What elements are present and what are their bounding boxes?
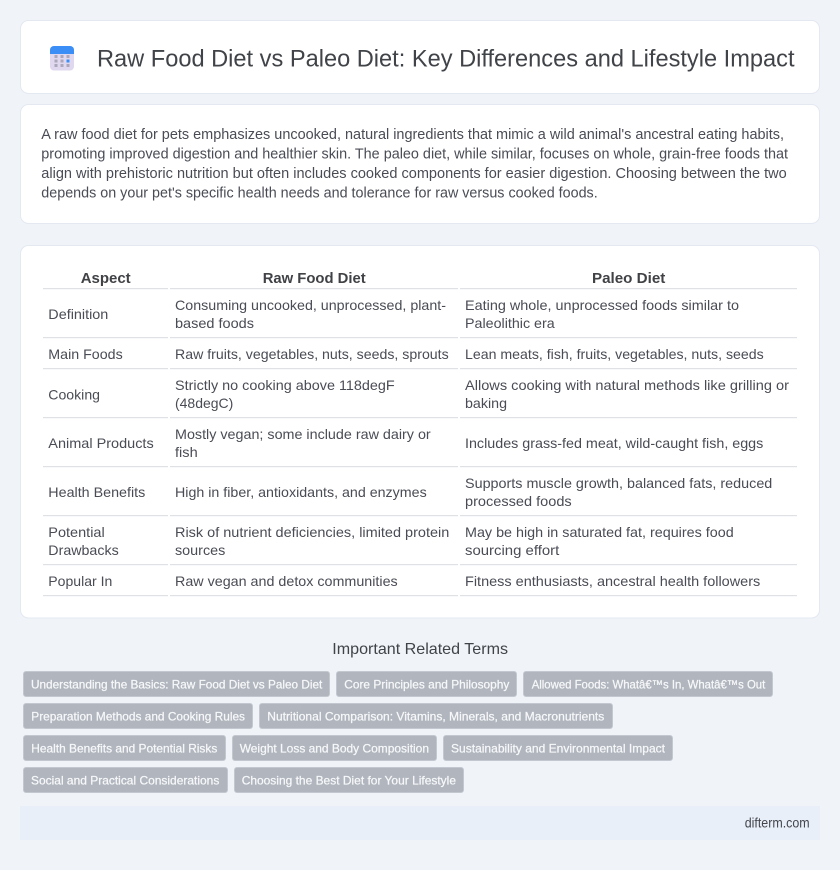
row: animal products: Includes grass-fed meat, wild-caught fish, eggs bbox=[465, 435, 763, 451]
panel: related term tags bbox=[24, 672, 772, 792]
footer: difterm.com bbox=[745, 815, 810, 830]
tag: Social and Practical Considerations bbox=[31, 774, 219, 788]
row: popular in bbox=[48, 573, 760, 589]
tag bbox=[336, 672, 516, 696]
row: main foods bbox=[48, 346, 764, 362]
panel: title card bbox=[20, 20, 820, 94]
row: cooking bbox=[48, 377, 789, 411]
tag: Core Principles and Philosophy bbox=[344, 678, 509, 692]
row: animal products: Animal Products bbox=[48, 435, 154, 451]
row: popular in: Popular In bbox=[48, 573, 112, 589]
text block: introduction paragraph: A raw food diet for pets emphasizes uncooked, natural ingredients that mimic a wild animal's ancestral eating habits, bbox=[41, 127, 784, 143]
row: health benefits bbox=[48, 475, 772, 509]
row: cooking: baking bbox=[465, 395, 507, 411]
tag bbox=[524, 672, 772, 696]
row: definition: Definition bbox=[48, 306, 108, 322]
tag bbox=[260, 704, 612, 728]
row: potential drawbacks: sources bbox=[175, 542, 225, 558]
row: cooking: (48degC) bbox=[175, 395, 233, 411]
table header: Aspect bbox=[81, 270, 131, 287]
row: cooking: Cooking bbox=[48, 386, 100, 402]
row: definition: Eating whole, unprocessed foods similar to bbox=[465, 297, 739, 313]
table header: Paleo Diet bbox=[592, 270, 665, 287]
tag: Allowed Foods: Whatâ€™s In, Whatâ€™s Out bbox=[532, 678, 766, 692]
row: potential drawbacks bbox=[48, 524, 734, 558]
tag: Health Benefits and Potential Risks bbox=[31, 742, 217, 756]
row: animal products: Mostly vegan; some include raw dairy or bbox=[175, 426, 431, 442]
tag: Weight Loss and Body Composition bbox=[240, 742, 429, 756]
row: cooking: Strictly no cooking above 118degF bbox=[175, 377, 395, 393]
row: health benefits: Health Benefits bbox=[48, 484, 145, 500]
tag bbox=[24, 704, 252, 728]
row: potential drawbacks: May be high in saturated fat, requires food bbox=[465, 524, 734, 540]
row: main foods: Lean meats, fish, fruits, vegetables, nuts, seeds bbox=[465, 346, 764, 362]
text block: introduction paragraph: align with prehistoric nutrition but often includes cooked components for easier digestion. Choosing between the two bbox=[41, 166, 787, 182]
text block: introduction paragraph bbox=[41, 127, 788, 201]
row: potential drawbacks: Risk of nutrient deficiencies, limited protein bbox=[175, 524, 449, 540]
tag bbox=[24, 672, 330, 696]
row: health benefits: processed foods bbox=[465, 493, 572, 509]
text block: introduction paragraph: promoting improved digestion and healthier skin. The paleo diet, while similar, focuses on whole, grain-free foods that bbox=[41, 146, 788, 162]
icon: calendar bbox=[50, 46, 74, 70]
row: definition: Consuming uncooked, unprocessed, plant- bbox=[175, 297, 446, 313]
row: definition: Paleolithic era bbox=[465, 315, 555, 331]
footer bbox=[20, 806, 820, 840]
tag: Choosing the Best Diet for Your Lifestyle bbox=[242, 774, 456, 788]
row: popular in: Fitness enthusiasts, ancestral health followers bbox=[465, 573, 760, 589]
heading: important related terms: Important Related Terms bbox=[332, 641, 508, 658]
row: health benefits: High in fiber, antioxidants, and enzymes bbox=[175, 484, 427, 500]
title: Raw Food Diet vs Paleo Diet: Key Differences and Lifestyle Impact bbox=[97, 46, 795, 73]
tag bbox=[24, 768, 228, 792]
tag: Understanding the Basics: Raw Food Diet vs Paleo Diet bbox=[31, 678, 323, 692]
tag bbox=[444, 736, 672, 760]
table header bbox=[81, 270, 665, 287]
tag bbox=[24, 736, 226, 760]
tag bbox=[234, 768, 464, 792]
row: cooking: Allows cooking with natural methods like grilling or bbox=[465, 377, 789, 393]
row: potential drawbacks: sourcing effort bbox=[465, 542, 559, 558]
text block: introduction paragraph: depends on your pet's specific health needs and tolerance for raw versus cooked foods. bbox=[41, 185, 598, 201]
row: potential drawbacks: Potential bbox=[48, 524, 105, 540]
row: definition: based foods bbox=[175, 315, 254, 331]
row: animal products: fish bbox=[175, 444, 198, 460]
row: health benefits: Supports muscle growth, balanced fats, reduced bbox=[465, 475, 772, 491]
tag: Nutritional Comparison: Vitamins, Minerals, and Macronutrients bbox=[267, 710, 604, 724]
tag: Preparation Methods and Cooking Rules bbox=[31, 710, 245, 724]
row: main foods: Raw fruits, vegetables, nuts, seeds, sprouts bbox=[175, 346, 449, 362]
row: potential drawbacks: Drawbacks bbox=[48, 542, 119, 558]
table header: Raw Food Diet bbox=[263, 270, 366, 287]
tag: Sustainability and Environmental Impact bbox=[451, 742, 666, 756]
row: popular in: Raw vegan and detox communities bbox=[175, 573, 398, 589]
tag bbox=[232, 736, 436, 760]
panel: comparison table bbox=[20, 246, 820, 618]
row: definition bbox=[48, 297, 739, 331]
row: animal products bbox=[48, 426, 763, 460]
row: main foods: Main Foods bbox=[48, 346, 123, 362]
panel: introduction bbox=[20, 104, 820, 224]
